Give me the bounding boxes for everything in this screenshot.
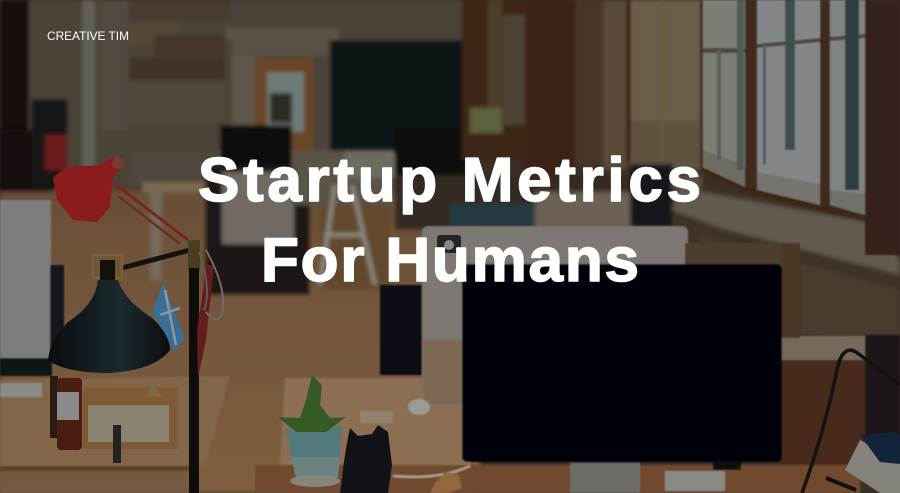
logo: Creative Tim: CREATIVE TIM	[47, 31, 129, 43]
title: Startup Metrics	[198, 146, 701, 215]
windows	[627, 0, 900, 255]
icon: potted plant	[278, 375, 346, 487]
title: For Humans	[261, 226, 639, 295]
icon: cable and books	[802, 350, 900, 493]
back wall	[0, 0, 702, 190]
icon: camera sticker	[437, 235, 461, 253]
icon: black desk lamp	[48, 240, 223, 493]
title	[198, 146, 701, 295]
desks and monitors	[0, 200, 900, 493]
icon: lucky cat	[340, 425, 392, 493]
floor and back area	[0, 100, 900, 493]
icon: desk clock and bottle	[50, 376, 178, 463]
icon: red desk lamp	[53, 157, 188, 244]
